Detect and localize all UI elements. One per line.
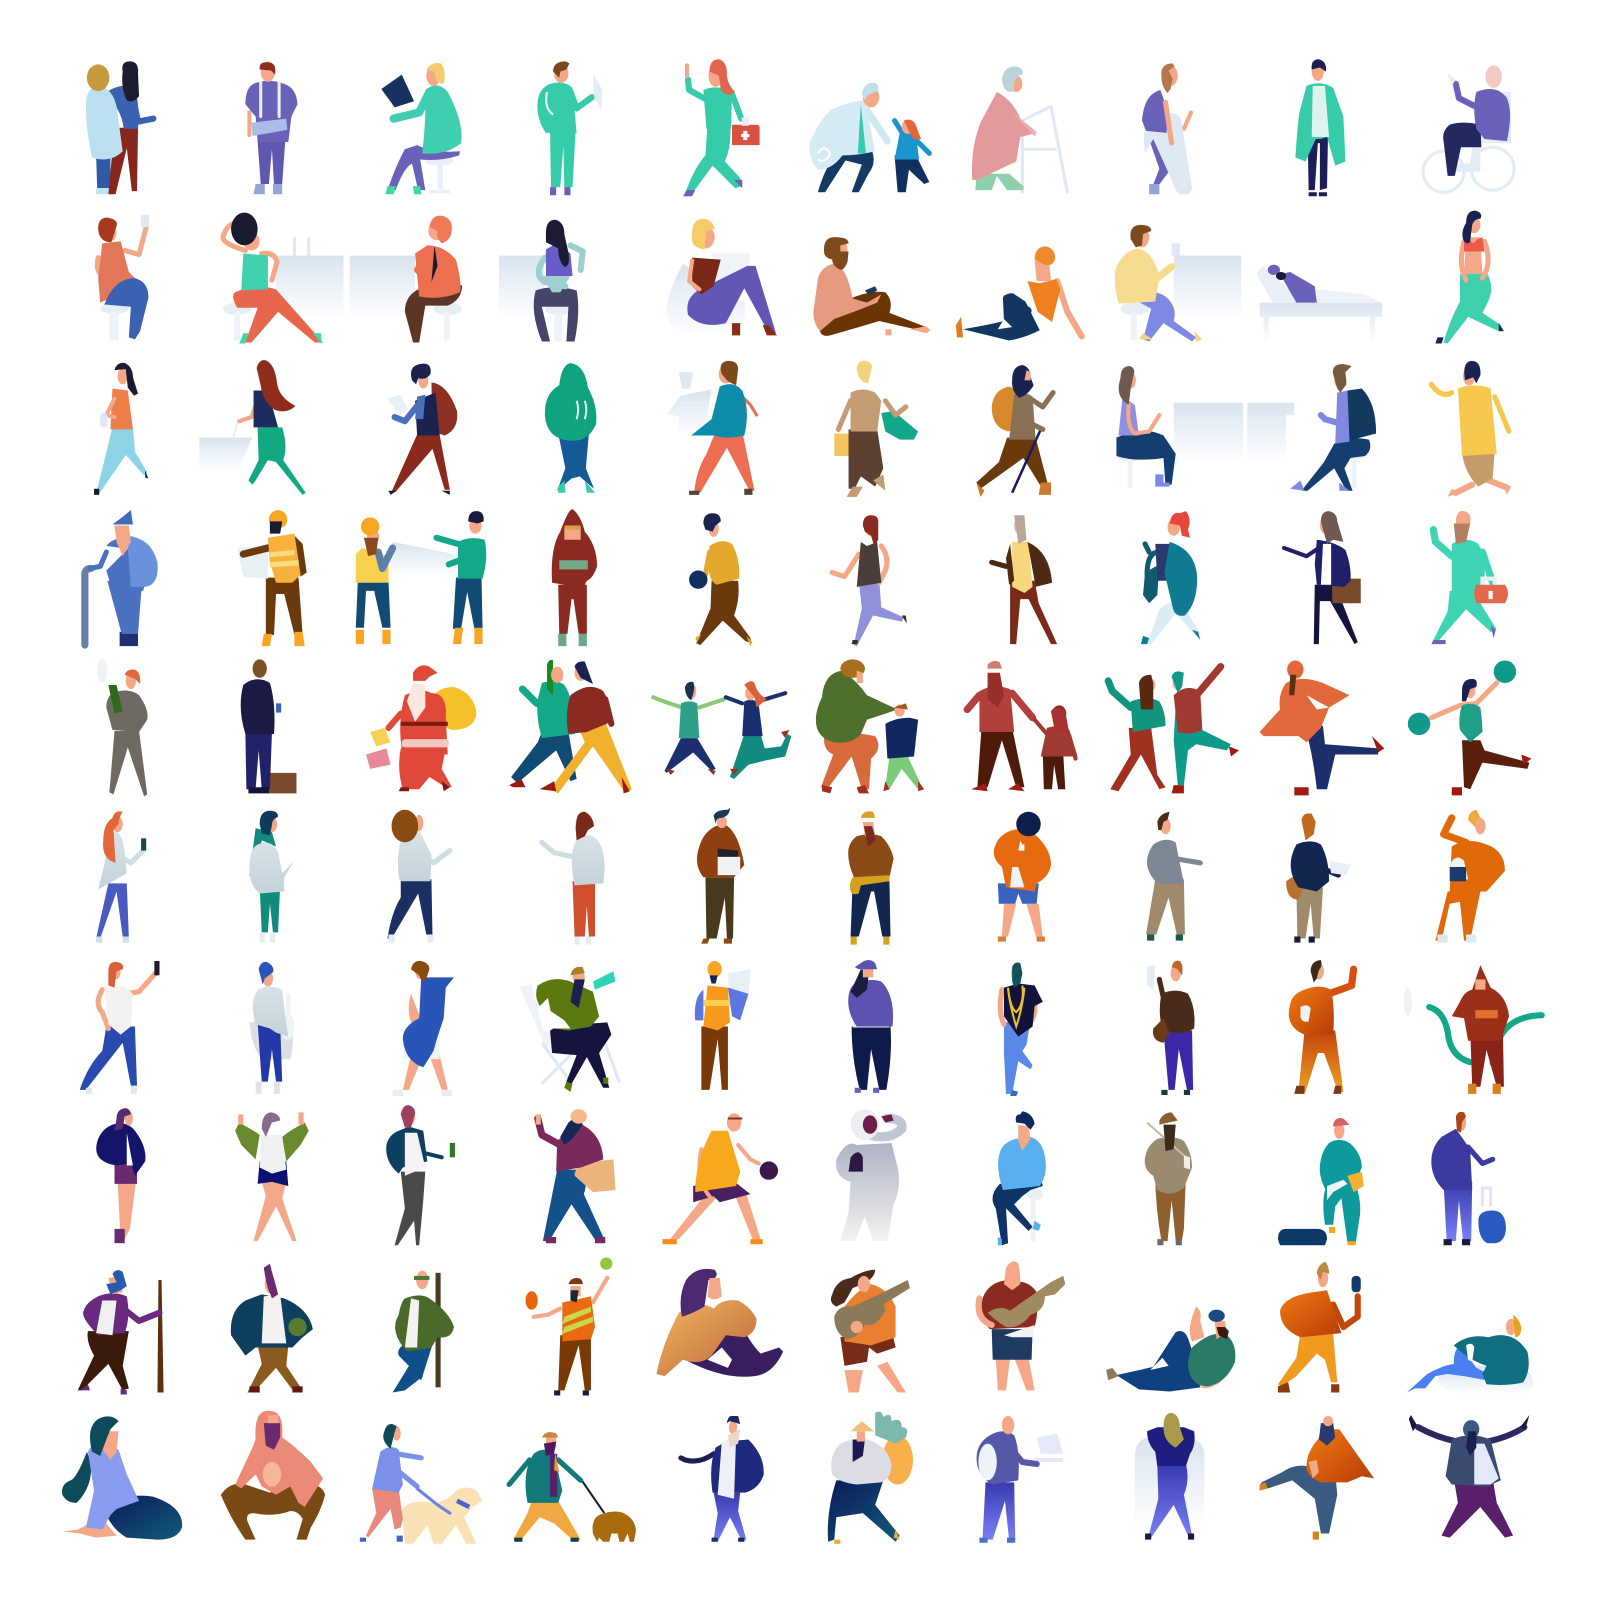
figure: elderly person in wheelchair [1423, 65, 1514, 192]
figure: crouching bearded man in hood [221, 1411, 325, 1540]
figure: man carrying white board [1142, 63, 1192, 195]
figure: woman in teal coat [1141, 511, 1200, 644]
figure: man with crossed arms and yellow hat [848, 811, 894, 945]
figure: man in red sweater with child [967, 661, 1078, 791]
figure: parent and child dancing in green coat [816, 659, 924, 793]
figure: film director with clapboard [697, 808, 744, 944]
figure: doctor with stethoscope [537, 61, 602, 195]
figure: bald man holding papers [977, 1416, 1063, 1543]
figure: construction worker with plan [237, 510, 307, 646]
figure: man raising two pistols [1409, 1415, 1529, 1538]
figure: basketball player [662, 1113, 778, 1244]
figure: santa with gift sack [366, 665, 476, 791]
figure: man with shoulder bag and paper [1147, 961, 1195, 1095]
figure: woman taking selfie [80, 961, 159, 1094]
figure: man with arm sling [245, 61, 298, 194]
figure: walking woman with orange top [94, 363, 148, 495]
figure: man in navy jacket [681, 1416, 764, 1542]
figure: woman from behind on stool [499, 220, 583, 341]
figure: seated bearded man with phone [813, 237, 930, 336]
figure: bearded man with tan bag [536, 1109, 615, 1243]
figure: hiker with backpack and stick [976, 365, 1053, 497]
figure: man with long brown hair [387, 810, 450, 943]
figure: seated woman in gold robe [656, 1269, 783, 1377]
figure: woman with shopping bags [834, 361, 918, 497]
figure: man with crossed arms on stool [993, 1111, 1046, 1245]
figure: person in green hoodie [545, 363, 596, 493]
figure: astronaut [836, 1109, 902, 1241]
figure: man smoking with bottle [97, 658, 148, 796]
figure: traveler with suitcase [1431, 1112, 1506, 1245]
figure: man with phone in orange jacket [1278, 1262, 1361, 1392]
figure: man in yellow hoodie on stool [1115, 225, 1241, 341]
figure: man carrying box [667, 361, 757, 495]
figure: man with gold chains [1000, 963, 1043, 1096]
figure: two builders holding a plan [356, 511, 486, 644]
figure: woman on beanbag [667, 219, 777, 337]
figure: elderly woman with walker [972, 66, 1067, 192]
figure: referee in hi-vis vest with paddles [525, 1258, 612, 1396]
figure: woman carrying blue cloth [393, 961, 454, 1096]
figure: woman with phone, orange hair [96, 811, 146, 943]
figure: man with orange cape [1260, 1416, 1374, 1540]
figure: person in red hood [552, 509, 597, 646]
figure: worker with orange vest and blueprint [695, 961, 750, 1090]
figure: woman with arms raised in green jacket [235, 1112, 309, 1241]
figure: director on folding chair with megaphone [519, 967, 620, 1092]
figure: hooded person with green hose [1404, 965, 1542, 1094]
figure: man with navy vest on stool [1290, 364, 1376, 491]
figure: old man with cane [85, 510, 158, 646]
figure: mechanic with wrench and bag [1278, 1118, 1364, 1245]
figure: bearded man in purple jacket and cap [848, 960, 893, 1093]
figure: patient on medical bed [1256, 265, 1382, 344]
figure: man playing guitar [979, 1261, 1065, 1390]
figure: woman from behind in glass booth [1135, 1413, 1204, 1540]
figure: reclining bearded man [1106, 1307, 1235, 1391]
figure: blindfolded man in olive jacket [393, 1271, 454, 1392]
figure: businesswoman with briefcase [1284, 511, 1361, 644]
figure: woman juggling teal balls [1408, 660, 1532, 795]
figure: nurse man with medical bag [1431, 511, 1508, 644]
figure: man running in orange coat [1260, 660, 1384, 795]
figure: bearded man with red trousers [542, 812, 605, 945]
figure: hunter with hat and beard [1145, 1112, 1192, 1245]
figure: woman in yellow sweater walking [1431, 361, 1511, 497]
figure: man in orange jacket and shorts [994, 812, 1051, 942]
figure: woman sitting with tablet [381, 63, 462, 194]
figure: doctor and bearded man [86, 61, 153, 194]
figure: man holding bowling ball [689, 513, 752, 646]
figure: firefighter waving [1289, 960, 1354, 1094]
figure: woman with bottle in dark jacket [386, 1105, 455, 1245]
figure: man in navy coat with briefcase [241, 659, 296, 793]
figure: firefighter with helmet [1435, 810, 1505, 943]
figure: dancing couple [653, 681, 791, 779]
figure: woman on stool at bar [223, 213, 344, 344]
figure: bearded man running in tank top [832, 515, 907, 646]
figure: woman with vase [249, 962, 294, 1094]
figure: woman on stool with glass [97, 215, 149, 340]
figure: woman walking golden dog [360, 1424, 483, 1544]
figure: bearded man with walking staff [78, 1270, 164, 1395]
figure: old doctor with child [809, 83, 929, 192]
figure: man with backpack reading [387, 364, 457, 495]
figure: couple walking in winter clothes [509, 660, 632, 793]
figure: bald man in brown jacket [992, 515, 1057, 644]
figure: man walking brown dog [509, 1432, 636, 1542]
figure: woman playing guitar [831, 1270, 910, 1392]
figure: jogging woman in sports bra [1435, 211, 1504, 344]
figure: man with camera bag and paper [1286, 813, 1352, 943]
figure: doctor in green coat [1295, 59, 1345, 196]
figure: woman at table with glass [1116, 366, 1294, 488]
figure: man on stool in coral jacket [350, 216, 462, 342]
figure: woman pulling shopping cart [199, 360, 306, 495]
figure: farmer with plant and basket [828, 1412, 913, 1544]
figure: man in grey sweater with cup [1146, 812, 1200, 941]
figure: reclining man with orange cap [956, 246, 1082, 340]
figure: man in teal jacket with hat in hand [231, 1264, 313, 1392]
figure: man on beanbag [1407, 1315, 1534, 1395]
figure: two friends dancing in winter clothes [1108, 667, 1239, 793]
figure: sitting woman with long hair [62, 1416, 182, 1540]
figure: woman with scarf [249, 811, 294, 943]
figure: woman in navy bomber jacket [96, 1108, 145, 1243]
figure: woman nurse with red bag [683, 59, 760, 196]
